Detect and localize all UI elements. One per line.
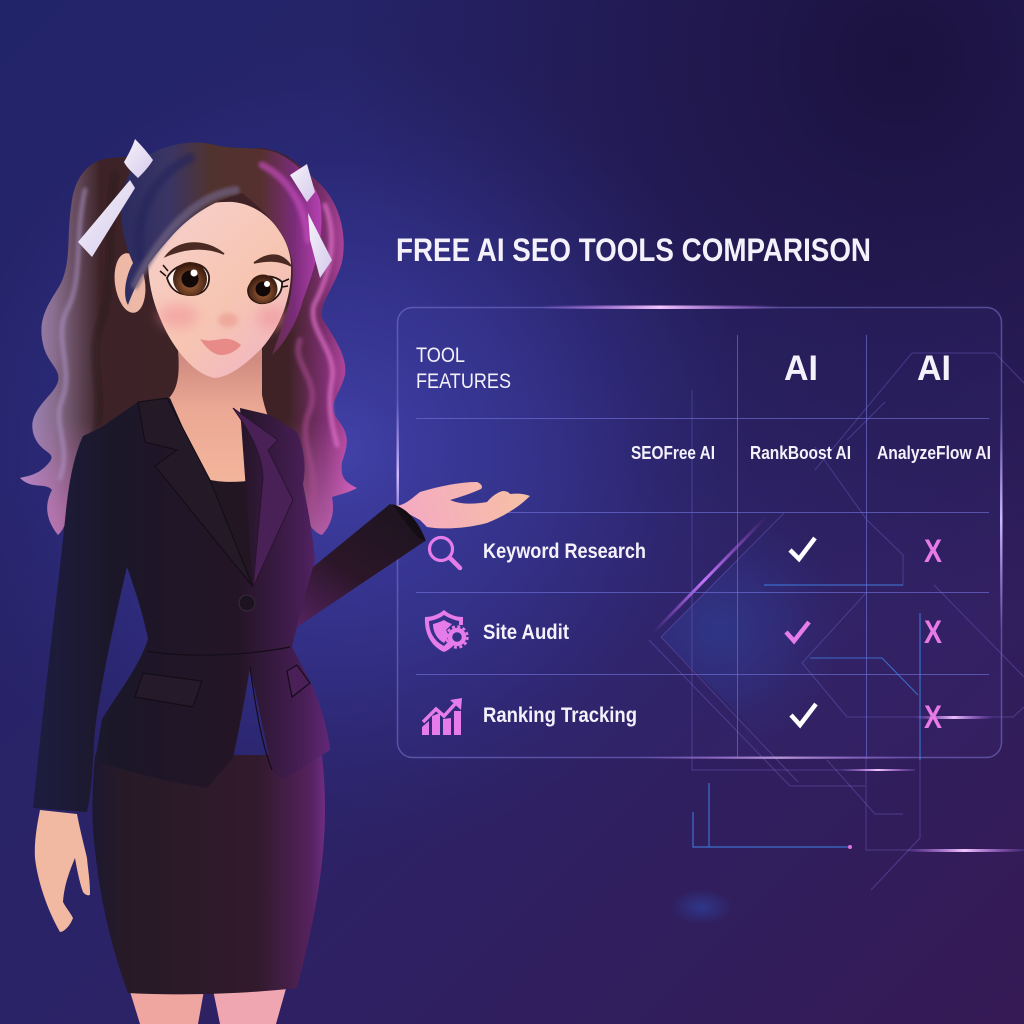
row: site audit	[425, 610, 943, 652]
decorative circuit lines	[649, 353, 1024, 925]
inner top	[206, 477, 274, 592]
tool names: RankBoost AI	[750, 443, 851, 463]
tool names: AnalyzeFlow AI	[877, 443, 991, 463]
column header: tool features: FEATURES	[416, 370, 511, 393]
hair back	[20, 148, 357, 535]
left eye	[160, 262, 209, 296]
right leg	[212, 985, 287, 1024]
icon: check pink	[786, 622, 809, 641]
left ribbon	[78, 139, 153, 257]
left eyebrow	[166, 243, 224, 256]
icon: check	[791, 704, 816, 725]
row: keyword research	[430, 533, 943, 569]
ear	[111, 251, 149, 315]
label: ranking tracking: Ranking Tracking	[483, 704, 637, 727]
mark: x: X	[924, 614, 943, 650]
neck and chest	[167, 340, 280, 482]
upturned hand	[392, 482, 530, 541]
column header: tool features	[416, 344, 511, 393]
jacket left lapel	[138, 398, 253, 587]
mark: x: X	[924, 533, 943, 569]
jacket right sleeve	[297, 504, 425, 627]
tool names: SEOFree AI	[631, 443, 715, 463]
title: FREE AI SEO TOOLS COMPARISON	[396, 232, 871, 268]
icon: magnifier	[430, 538, 460, 568]
right eye	[248, 274, 289, 304]
row: ranking tracking	[422, 698, 943, 735]
lips	[200, 339, 241, 355]
label: site audit: Site Audit	[483, 621, 569, 644]
jacket right lapel	[233, 408, 293, 587]
table grid	[416, 335, 989, 757]
panel frame	[398, 308, 1002, 758]
jacket button	[239, 595, 255, 611]
column header: tool features: TOOL	[416, 344, 465, 367]
cheek blush	[158, 304, 287, 329]
right eyebrow	[254, 255, 291, 266]
jacket body	[95, 398, 330, 788]
character: presenter	[20, 139, 530, 1024]
column logo: AI third column: AI	[917, 349, 951, 388]
skirt	[92, 755, 325, 994]
icon: check	[790, 538, 815, 559]
mark: x: X	[924, 699, 943, 735]
jacket left sleeve	[33, 428, 129, 812]
label: keyword research: Keyword Research	[483, 540, 646, 563]
icon: growth chart	[422, 698, 462, 735]
panel: comparison table	[396, 306, 1002, 759]
hair swoop and highlights	[135, 158, 308, 285]
icon: shield with gear	[425, 610, 468, 652]
face	[148, 202, 291, 378]
jacket waist seam and pockets	[135, 647, 310, 770]
column logo: AI second column: AI	[784, 349, 818, 388]
crown hair	[121, 142, 322, 355]
lower hand	[35, 810, 90, 932]
tool names	[631, 443, 991, 463]
right ribbon	[290, 164, 332, 278]
panel edge glows	[396, 306, 1002, 759]
nose	[218, 313, 238, 327]
left leg	[128, 985, 205, 1024]
